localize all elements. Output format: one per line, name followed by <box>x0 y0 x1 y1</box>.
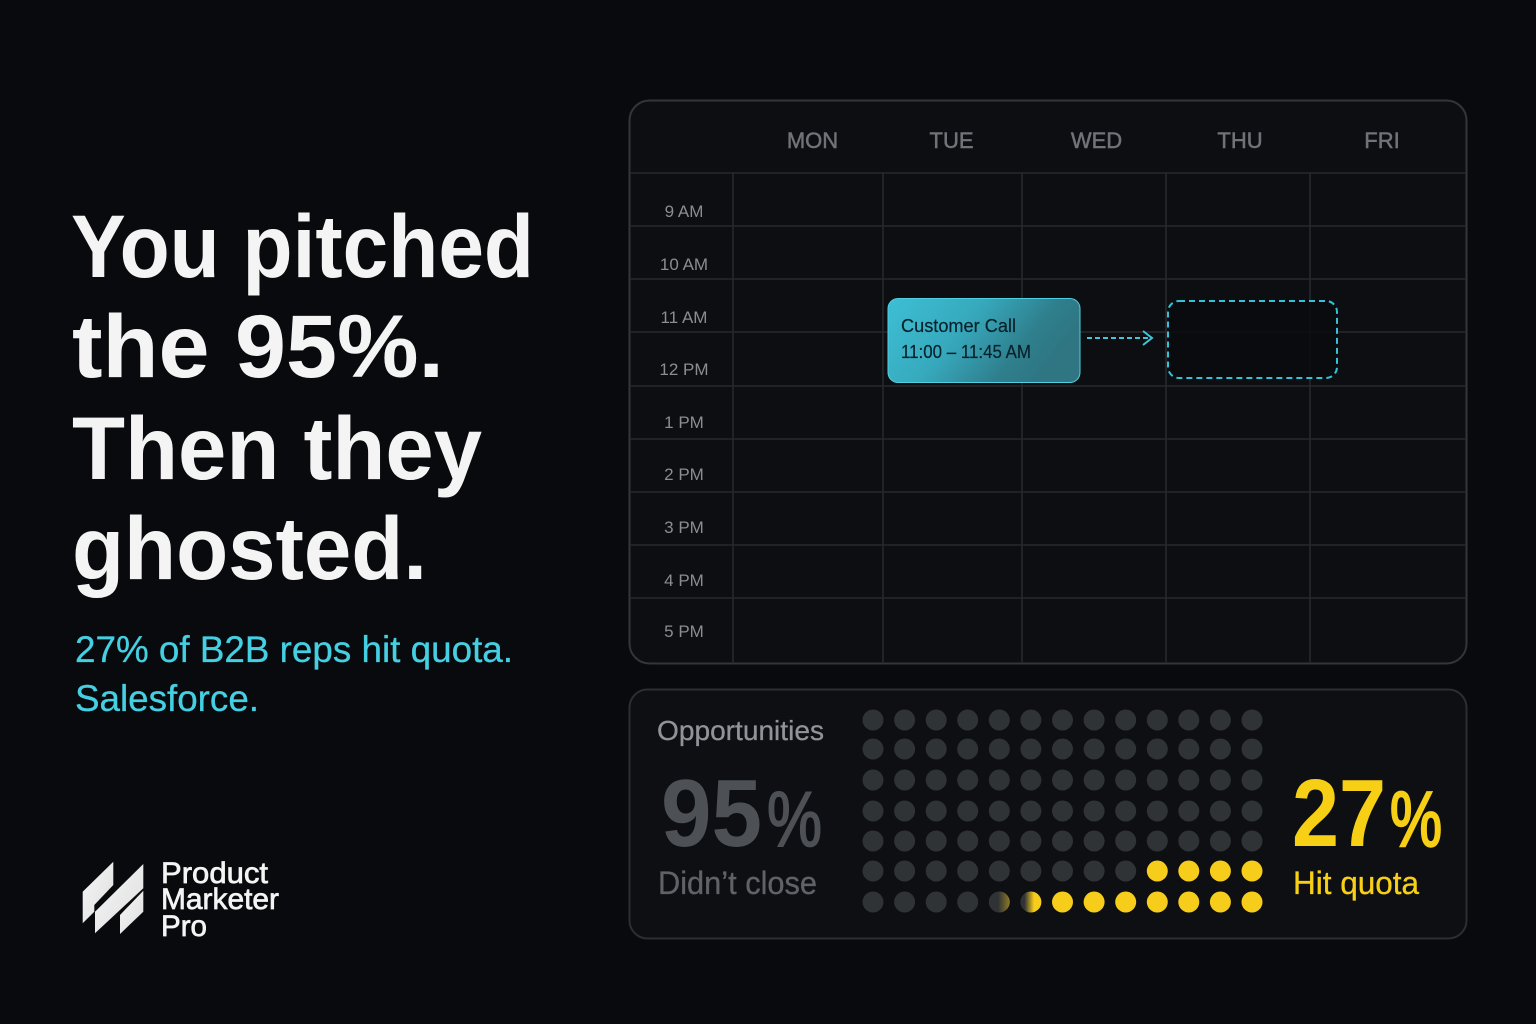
icon: logo mark <box>83 862 143 934</box>
event: customer call <box>888 298 1080 382</box>
stat: 27 percent: % <box>1390 775 1442 863</box>
headline: ghosted. <box>72 498 427 598</box>
calendar time labels <box>659 202 709 641</box>
calendar day headers: FRI <box>1364 128 1400 153</box>
calendar day headers: WED <box>1071 128 1122 153</box>
logo wordmark <box>161 857 279 943</box>
logo wordmark: Product <box>161 857 269 890</box>
subheading: 27% of B2B reps hit quota. <box>75 629 513 670</box>
opportunities label: Opportunities <box>657 715 824 746</box>
panel: opportunities <box>630 690 1466 938</box>
calendar time labels: 2 PM <box>664 465 704 484</box>
stat: 27 percent: 27 <box>1292 760 1386 867</box>
event: customer call: Customer Call <box>901 316 1016 336</box>
headline: You pitched <box>71 196 534 296</box>
stat: 27 percent <box>1292 760 1442 901</box>
headline <box>71 196 534 598</box>
calendar time labels: 10 AM <box>660 255 708 274</box>
calendar time labels: 9 AM <box>665 202 703 221</box>
calendar day headers: MON <box>787 128 838 153</box>
event: customer call: 11:00 – 11:45 AM <box>901 342 1031 362</box>
logo wordmark: Marketer <box>161 883 279 916</box>
stat: 95 percent <box>658 760 822 901</box>
calendar time labels: 3 PM <box>664 518 704 537</box>
subheading <box>75 629 513 719</box>
headline: the 95%. <box>72 296 444 396</box>
headline: Then they <box>72 398 482 498</box>
calendar day headers: THU <box>1217 128 1263 153</box>
calendar day headers <box>787 128 1400 153</box>
stat: 95 percent: % <box>767 775 822 863</box>
calendar time labels: 1 PM <box>664 413 704 432</box>
stat: 27 percent: Hit quota <box>1293 865 1419 901</box>
dot matrix chart <box>862 710 1262 912</box>
stat: 95 percent: 95 <box>661 760 762 867</box>
logo: Product Marketer Pro <box>83 857 279 943</box>
calendar time labels: 4 PM <box>664 571 704 590</box>
empty dashed slot <box>1168 301 1337 378</box>
subheading: Salesforce. <box>75 678 259 719</box>
calendar time labels: 11 AM <box>661 308 707 327</box>
calendar time labels: 5 PM <box>664 622 704 641</box>
arrow: reschedule <box>1087 331 1152 345</box>
calendar day headers: TUE <box>930 128 974 153</box>
stat: 95 percent: Didn’t close <box>658 865 817 901</box>
logo wordmark: Pro <box>161 910 207 943</box>
panel: weekly calendar <box>630 100 1466 664</box>
calendar time labels: 12 PM <box>659 360 709 379</box>
